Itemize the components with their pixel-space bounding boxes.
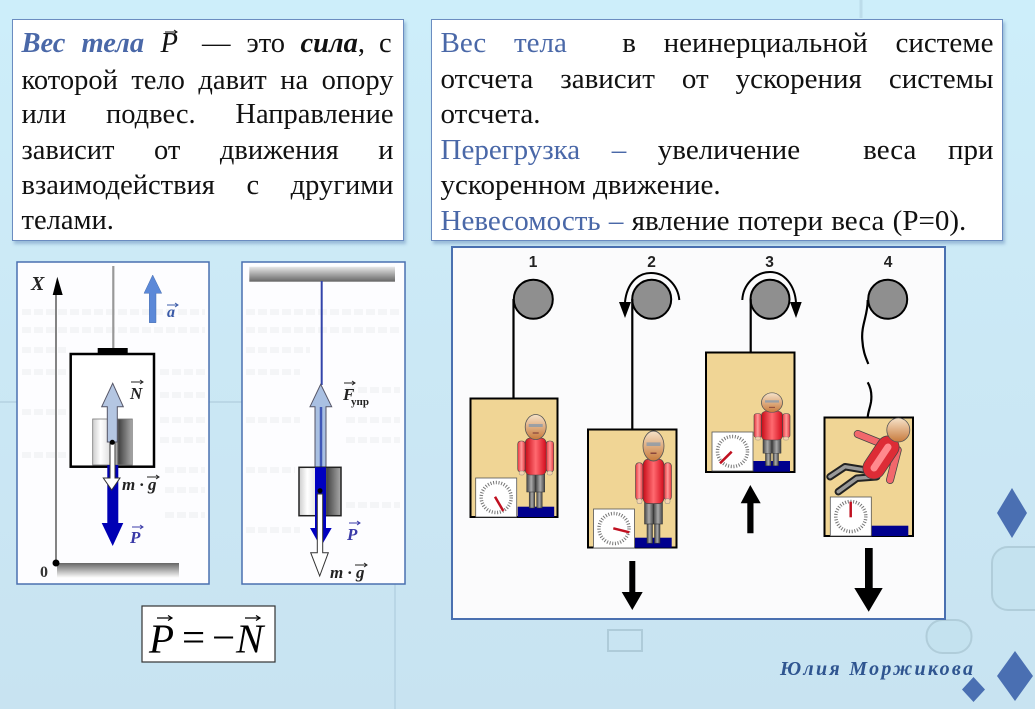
elevator 3 accelerating up: 3 [765, 254, 774, 271]
elevator 1 at rest [470, 254, 558, 517]
definition line 5: взаимодействия с другими [22, 170, 394, 201]
suspension rope [112, 266, 114, 348]
label F [342, 381, 369, 408]
ceiling [249, 267, 395, 282]
elevator 2 accelerating down: 2 [647, 254, 656, 271]
vector P arrow [310, 467, 332, 547]
block on support [93, 419, 132, 465]
panel: weight in non-inertial frame [431, 19, 1003, 241]
vector mg arrow [311, 494, 328, 576]
label P [346, 521, 360, 544]
elevator 4 free fall: 4 [884, 254, 893, 271]
elevator 1 at rest: 1 [529, 254, 538, 271]
weight on thread [299, 467, 341, 516]
label F: F [342, 385, 355, 404]
vector N arrow [102, 383, 123, 442]
elastic force arrow [310, 384, 332, 467]
definition line 1: с [379, 28, 392, 59]
floor: 0 [40, 564, 48, 581]
panel: suspension diagram [242, 262, 405, 584]
author signature: Юлия Моржикова [779, 658, 973, 680]
thread [321, 281, 323, 385]
elevator 3 accelerating up [706, 254, 802, 533]
definition line 1: сила, [300, 28, 365, 59]
label m g: m · g [330, 563, 365, 582]
elevator 4 free fall [824, 254, 913, 612]
frame line 1: Вес тела в неинерциальной системе [440, 27, 994, 59]
definition line 1: — [202, 28, 230, 59]
weightlessness line: Невесомость – явление потери веса (Р=0). [440, 205, 966, 237]
overload line 2: ускоренном движение. [440, 169, 721, 201]
definition line 2: которой тело давит на опору [22, 65, 394, 96]
floor [40, 560, 179, 581]
mount [98, 348, 128, 354]
elevator 2 accelerating down [588, 254, 679, 610]
definition line 4: зависит от движения и [22, 135, 394, 166]
formula P = -N: P [148, 616, 174, 662]
label P: P [346, 525, 358, 544]
vector arrow above P in definition [165, 30, 177, 34]
decorative diamonds [962, 488, 1033, 702]
frame line 3: отсчета. [440, 98, 541, 130]
label a [167, 303, 178, 321]
formula P = -N: − [212, 614, 235, 660]
formula P = -N [142, 606, 275, 662]
lift cabin [71, 354, 154, 467]
panel: elevator diagram [452, 247, 945, 619]
vector mg arrow [103, 443, 120, 490]
label N: N [129, 384, 143, 403]
panel: definition of body weight [12, 19, 404, 241]
X axis [30, 273, 63, 563]
definition line 1: тела [82, 28, 144, 59]
acceleration arrow [144, 275, 162, 323]
panel: support diagram [17, 262, 209, 584]
label P [129, 525, 143, 547]
definition line 1: это [246, 28, 285, 59]
label m g: m · g [122, 475, 157, 494]
formula P = -N: N [235, 616, 266, 662]
label a: a [167, 304, 175, 321]
definition line 3: или подвес. Направление [22, 99, 394, 130]
label F: упр [351, 396, 369, 408]
vector P arrow [102, 465, 123, 546]
definition line 1: P [160, 28, 178, 59]
definition line 6: телами. [22, 205, 114, 236]
overload line 1: Перегрузка – увеличение веса при [440, 134, 994, 166]
frame line 2: отсчета зависит от ускорения системы [440, 63, 994, 95]
definition line 1: Вес [22, 28, 65, 59]
formula P = -N: = [182, 614, 205, 660]
label P: P [129, 528, 141, 547]
X axis: X [30, 273, 45, 295]
definition line 1 [21, 28, 392, 59]
